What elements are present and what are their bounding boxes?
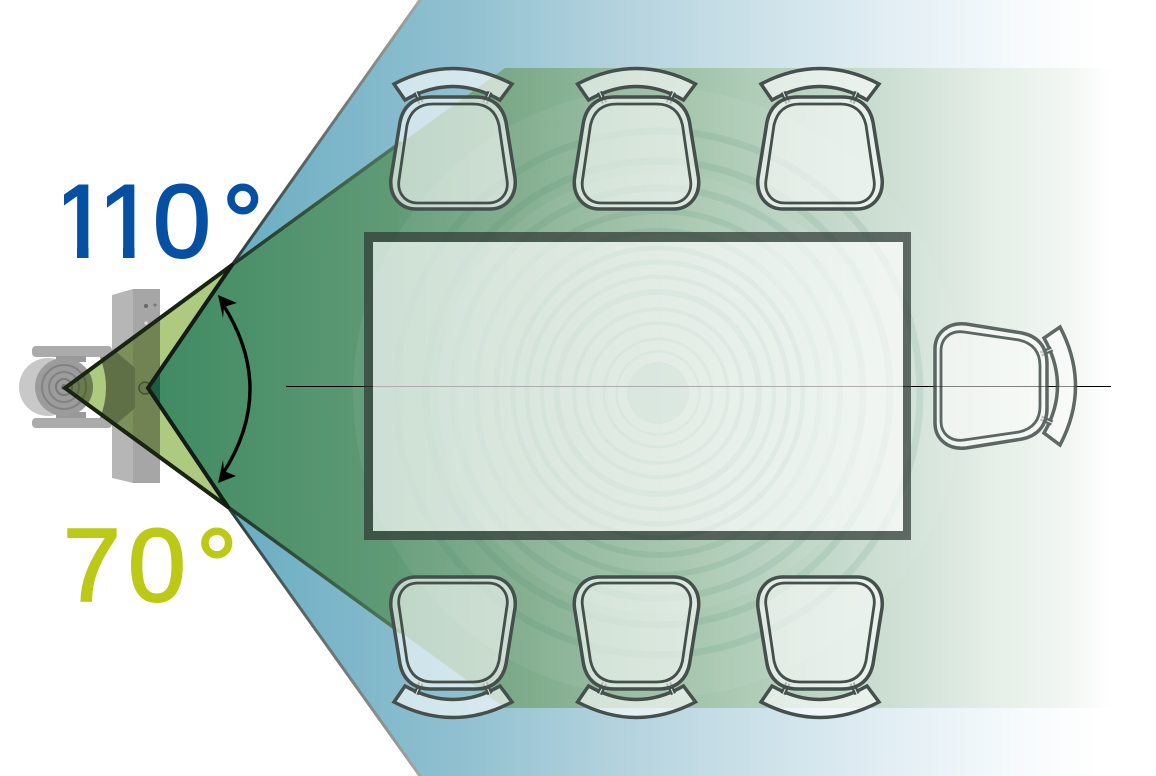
chair: top middle — [574, 68, 699, 209]
concentric sound rings — [353, 88, 963, 698]
field of view outlines — [65, 0, 420, 776]
label: 110 degrees: 110° — [52, 164, 264, 280]
meeting table — [364, 232, 911, 540]
dark inner wedge where views overlap the mount — [148, 371, 160, 406]
chair: top right — [758, 68, 882, 209]
chair: bottom right — [758, 577, 882, 718]
light green 70 degree wedge at camera — [65, 265, 232, 507]
conference camera — [19, 346, 112, 428]
table surface — [373, 242, 903, 531]
chair: bottom left — [391, 577, 515, 718]
camera mount bracket — [100, 289, 160, 483]
chair: top left — [391, 68, 515, 209]
label: 70 degrees: 70° — [63, 508, 238, 624]
70 degree green field of view — [148, 68, 1112, 708]
centre axis line — [286, 386, 1111, 388]
chair: bottom middle — [574, 577, 699, 718]
chair: head of table — [935, 324, 1076, 448]
double-headed angle arrow — [218, 295, 250, 483]
